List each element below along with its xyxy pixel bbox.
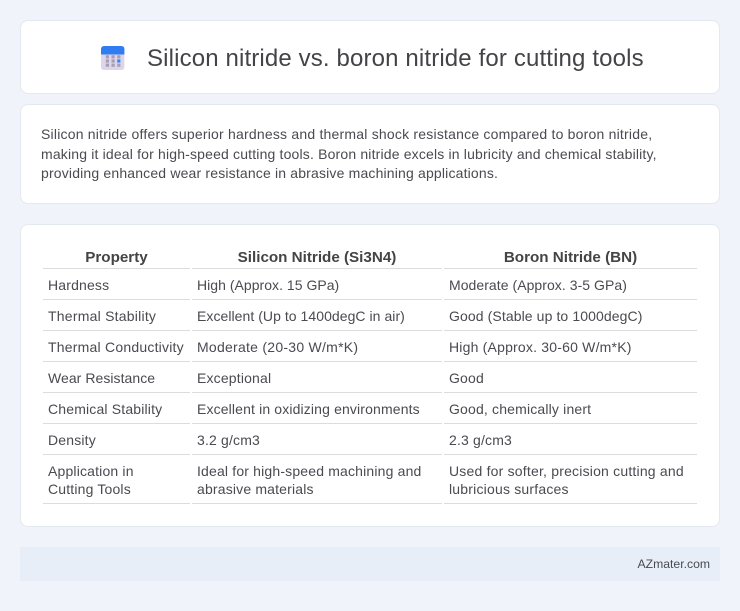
panel: summary card xyxy=(20,104,720,204)
row: thermal conductivity: Moderate (20-30 W/m*K) xyxy=(197,339,358,355)
row: application in cutting tools: Ideal for high-speed machining and xyxy=(197,463,421,479)
row: density: Density xyxy=(48,432,96,448)
row: wear resistance: Wear Resistance xyxy=(48,370,155,386)
summary text: making it ideal for high-speed cutting tools. Boron nitride excels in lubricity and chemical stability, xyxy=(41,146,657,162)
row: thermal conductivity: High (Approx. 30-60 W/m*K) xyxy=(449,339,632,355)
row: wear resistance: Exceptional xyxy=(197,370,271,386)
summary text: providing enhanced wear resistance in abrasive machining applications. xyxy=(41,165,498,181)
row: thermal conductivity xyxy=(48,339,632,355)
summary text xyxy=(41,126,657,181)
row: chemical stability: Good, chemically inert xyxy=(449,401,591,417)
row: hardness xyxy=(48,277,627,293)
row: thermal stability: Thermal Stability xyxy=(48,308,156,324)
panel: title card xyxy=(20,20,720,94)
row: application in cutting tools xyxy=(48,463,684,497)
row: density: 2.3 g/cm3 xyxy=(449,432,512,448)
row: density xyxy=(48,432,512,448)
column heading: silicon nitride: Silicon Nitride (Si3N4) xyxy=(238,249,396,266)
row: density: 3.2 g/cm3 xyxy=(197,432,260,448)
row: application in cutting tools: Cutting Tools xyxy=(48,481,131,497)
icon: calendar xyxy=(101,46,124,70)
footer bar xyxy=(20,547,720,581)
title: Silicon nitride vs. boron nitride for cutting tools xyxy=(147,45,644,72)
row: thermal conductivity: Thermal Conductivity xyxy=(48,339,184,355)
comparison table xyxy=(43,249,697,504)
row: wear resistance xyxy=(48,370,484,386)
row: application in cutting tools: abrasive materials xyxy=(197,481,314,497)
row: thermal stability xyxy=(48,308,642,324)
row: hardness: Hardness xyxy=(48,277,109,293)
column heading: property: Property xyxy=(85,249,148,266)
row: chemical stability: Excellent in oxidizing environments xyxy=(197,401,420,417)
footer source credit: AZmater.com xyxy=(638,557,710,571)
row: hardness: Moderate (Approx. 3-5 GPa) xyxy=(449,277,627,293)
summary text: Silicon nitride offers superior hardness and thermal shock resistance compared to boron nitride, xyxy=(41,126,652,142)
row: hardness: High (Approx. 15 GPa) xyxy=(197,277,339,293)
row: chemical stability xyxy=(48,401,591,417)
row: wear resistance: Good xyxy=(449,370,484,386)
panel: comparison table card xyxy=(20,224,720,527)
row: thermal stability: Excellent (Up to 1400degC in air) xyxy=(197,308,405,324)
row: thermal stability: Good (Stable up to 1000degC) xyxy=(449,308,642,324)
row: application in cutting tools: Used for softer, precision cutting and xyxy=(449,463,684,479)
row: application in cutting tools: Application in xyxy=(48,463,134,479)
column heading: boron nitride: Boron Nitride (BN) xyxy=(504,249,637,266)
row: chemical stability: Chemical Stability xyxy=(48,401,162,417)
row: application in cutting tools: lubricious surfaces xyxy=(449,481,569,497)
